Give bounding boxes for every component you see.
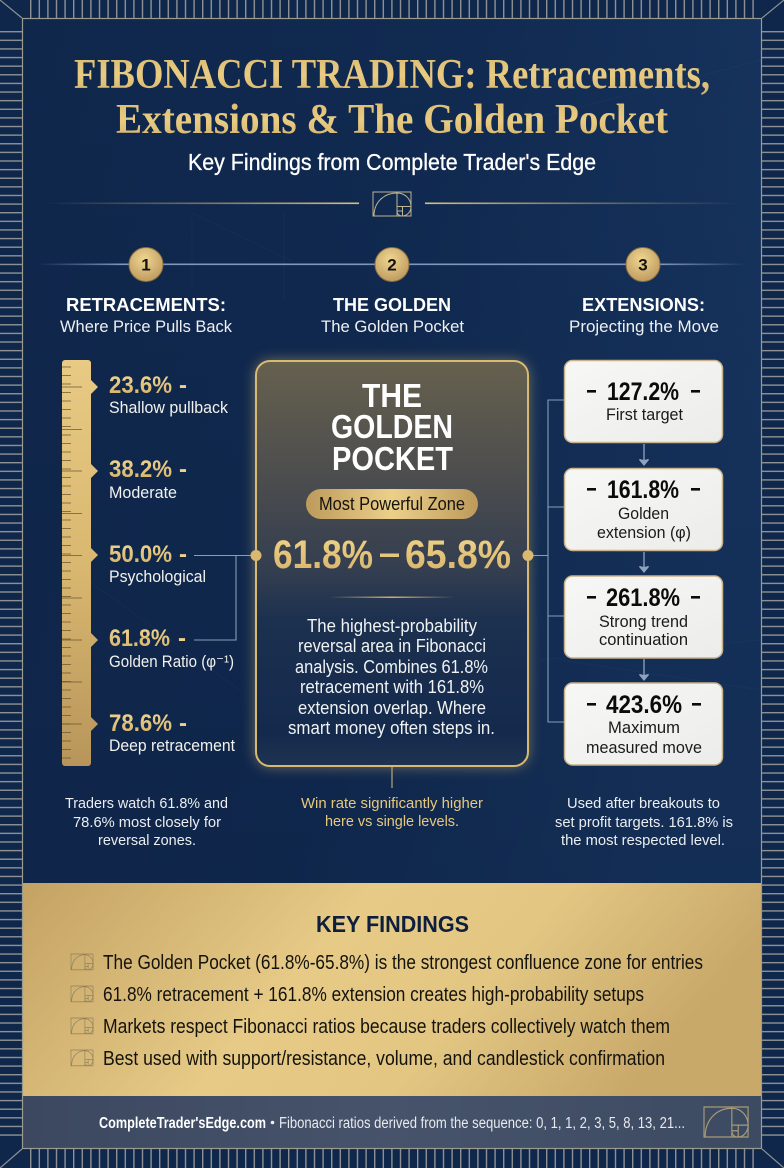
connector: golden pocket to extensions	[528, 400, 564, 722]
finding 2: 61.8% retracement + 161.8% extension creates high-probability setups	[103, 984, 644, 1006]
column heading: retracements: Where Price Pulls Back	[60, 317, 232, 336]
note: retracements	[65, 795, 228, 849]
card: 261.8%: 261.8%	[606, 584, 680, 612]
panel heading	[331, 377, 453, 477]
panel heading: GOLDEN	[331, 408, 453, 445]
footer Fibonacci icon	[704, 1107, 748, 1137]
retracement ruler	[62, 360, 98, 766]
note: win rate	[301, 795, 483, 830]
panel description: The highest-probability	[307, 616, 477, 636]
column heading: the golden	[321, 295, 464, 336]
panel description: analysis. Combines 61.8%	[295, 657, 488, 677]
card: 261.8%	[564, 576, 722, 658]
card: 161.8%: Golden	[618, 504, 669, 523]
card: 423.6%: 423.6%	[606, 691, 682, 719]
level 50.0%	[109, 541, 206, 586]
arrows between extension cards	[640, 444, 648, 680]
step 1 badge: 1	[141, 256, 151, 274]
column heading: extensions: EXTENSIONS:	[582, 295, 705, 315]
pill: most powerful zone	[306, 489, 478, 519]
card: 261.8%: continuation	[599, 630, 688, 649]
footer bar	[23, 1096, 761, 1148]
footer text	[99, 1115, 685, 1132]
connector: retracements to golden pocket	[194, 556, 256, 640]
title: FIBONACCI TRADING: Retracements,	[74, 52, 710, 98]
level 61.8%: Golden Ratio (φ⁻¹)	[109, 652, 234, 671]
column heading: the golden: The Golden Pocket	[321, 317, 464, 336]
note: extensions: Used after breakouts to	[567, 795, 720, 812]
column heading: the golden: THE GOLDEN	[333, 295, 451, 315]
level 38.2%: -	[179, 456, 187, 483]
subtitle: Key Findings from Complete Trader's Edge	[188, 149, 596, 175]
card: 161.8%: 161.8%	[607, 476, 679, 504]
panel: golden pocket	[250, 361, 534, 766]
golden pocket range	[273, 533, 511, 577]
card: 423.6%: measured move	[586, 738, 702, 757]
step timeline	[38, 248, 746, 282]
note: extensions: the most respected level.	[561, 832, 725, 849]
column heading: extensions	[569, 295, 719, 336]
level 23.6%: -	[179, 372, 187, 399]
note: win rate: Win rate significantly higher	[301, 795, 483, 812]
card: 423.6%: Maximum	[608, 718, 680, 737]
panel description: smart money often steps in.	[288, 718, 495, 738]
level 50.0%: -	[179, 541, 187, 568]
column heading: retracements	[60, 295, 232, 336]
card: 161.8%	[564, 468, 722, 550]
level 78.6%	[109, 710, 235, 755]
connector dots	[250, 550, 534, 561]
level 50.0%: 50.0%	[109, 541, 172, 568]
golden pocket range: 61.8%	[273, 533, 373, 577]
note: retracements: 78.6% most closely for	[73, 814, 221, 831]
note: win rate: here vs single levels.	[325, 813, 459, 830]
finding 3: Markets respect Fibonacci ratios because traders collectively watch them	[103, 1016, 670, 1038]
panel description: reversal area in Fibonacci	[298, 636, 486, 656]
step 2 badge	[375, 248, 409, 282]
level 61.8%: 61.8%	[109, 625, 170, 652]
note: retracements: Traders watch 61.8% and	[65, 795, 228, 812]
level 23.6%: Shallow pullback	[109, 398, 228, 417]
finding 4: Best used with support/resistance, volume, and candlestick confirmation	[103, 1048, 665, 1070]
note: retracements: reversal zones.	[98, 832, 196, 849]
step 3 badge	[626, 248, 660, 282]
header divider with Fibonacci icon	[45, 192, 739, 216]
level 78.6%: -	[179, 710, 187, 737]
panel: key findings	[23, 883, 761, 1096]
pill: most powerful zone: Most Powerful Zone	[319, 494, 465, 514]
panel heading: POCKET	[332, 440, 453, 477]
level 23.6%: 23.6%	[109, 372, 172, 399]
key findings heading: KEY FINDINGS	[316, 911, 469, 937]
level 78.6%: Deep retracement	[109, 736, 235, 755]
column heading: extensions: Projecting the Move	[569, 317, 719, 336]
footer text: CompleteTrader'sEdge.com	[99, 1115, 266, 1132]
note: extensions: set profit targets. 161.8% is	[555, 814, 733, 831]
card: 127.2%: First target	[606, 405, 683, 424]
level 50.0%: Psychological	[109, 567, 206, 586]
level 38.2%	[109, 456, 187, 502]
step 3 badge: 3	[638, 256, 648, 274]
level 61.8%: -	[178, 625, 186, 652]
stem below golden pocket	[391, 767, 393, 788]
note: extensions	[555, 795, 733, 849]
title: Extensions & The Golden Pocket	[116, 97, 668, 143]
level 38.2%: Moderate	[109, 483, 177, 502]
card: 127.2%	[564, 360, 722, 442]
level 38.2%: 38.2%	[109, 456, 172, 483]
card: 161.8%: extension (φ)	[597, 523, 691, 542]
panel description: extension overlap. Where	[298, 698, 486, 718]
title	[74, 52, 710, 143]
finding 1: The Golden Pocket (61.8%-65.8%) is the strongest confluence zone for entries	[103, 952, 703, 974]
panel heading: THE	[362, 377, 422, 414]
card: 423.6%	[564, 683, 722, 765]
column heading: retracements: RETRACEMENTS:	[66, 295, 226, 315]
level 23.6%	[109, 372, 228, 417]
panel description: retracement with 161.8%	[300, 677, 484, 697]
footer text: Fibonacci ratios derived from the sequence: 0, 1, 1, 2, 3, 5, 8, 13, 21...	[279, 1115, 685, 1132]
level 78.6%: 78.6%	[109, 710, 172, 737]
card: 261.8%: Strong trend	[599, 612, 688, 631]
step 2 badge: 2	[387, 256, 397, 274]
card: 127.2%: 127.2%	[607, 378, 679, 406]
step 1 badge	[129, 248, 163, 282]
panel description	[288, 616, 495, 738]
golden pocket range: 65.8%	[405, 533, 511, 577]
level 61.8%	[109, 625, 234, 671]
